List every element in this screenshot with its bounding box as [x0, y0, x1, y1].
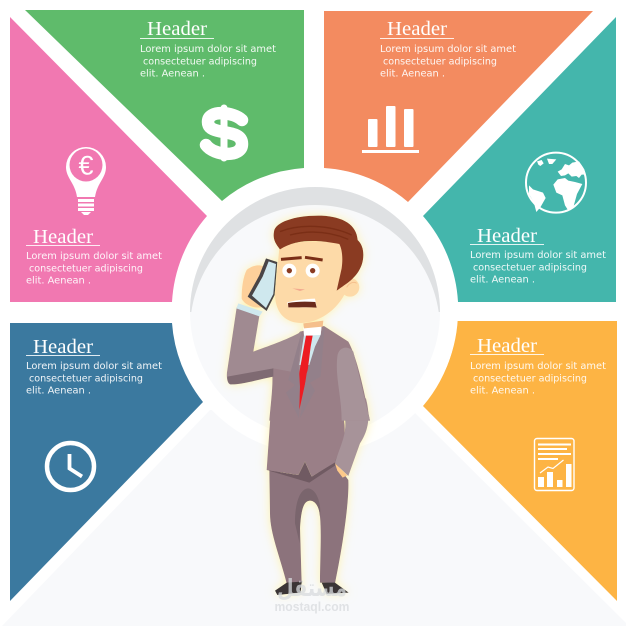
text: orange body: Lorem ipsum dolor sit amet [380, 44, 516, 55]
text: orange body [380, 44, 516, 80]
character nose [292, 288, 305, 291]
watermark: mostaql.com [274, 600, 350, 614]
panel: pink bulb [10, 17, 207, 302]
text: teal body [470, 250, 606, 286]
character hair [274, 216, 363, 291]
character phone [248, 258, 277, 311]
icon: bar chart [362, 106, 419, 153]
text: blue body: consectetuer adipiscing [29, 374, 143, 384]
icon: euro light bulb [66, 147, 106, 215]
center circle [172, 168, 458, 454]
character mouth [287, 299, 317, 308]
text: blue body: elit. Aenean . [26, 386, 91, 396]
panel: blue clock [10, 323, 203, 601]
icon: dollar sign [206, 108, 242, 158]
heading: blue header: Header [33, 336, 93, 358]
text: yellow body: consectetuer adipiscing [473, 374, 587, 384]
icon: euro light bulb: € [78, 150, 94, 180]
character: businessman on phone [227, 216, 370, 595]
text: yellow body: elit. Aenean . [470, 386, 535, 396]
character eyes [282, 264, 320, 278]
bottom light panel [2, 410, 626, 626]
heading: teal header: Header [477, 225, 537, 247]
heading: green header: Header [147, 18, 207, 40]
text: green body: elit. Aenean . [140, 68, 205, 80]
text: orange body: consectetuer adipiscing [383, 56, 497, 68]
text: blue body: Lorem ipsum dolor sit amet [26, 361, 162, 372]
character brows [281, 257, 323, 260]
panel: teal globe [423, 17, 616, 302]
character hand [242, 265, 267, 308]
text: blue body [26, 361, 162, 396]
icon: report document [534, 438, 574, 490]
character legs and lower jacket [267, 398, 368, 595]
text: green body: Lorem ipsum dolor sit amet [140, 44, 276, 55]
heading: pink header: Header [33, 226, 93, 248]
text: teal body: consectetuer adipiscing [473, 262, 587, 274]
panel: yellow report [423, 321, 617, 601]
text: green body [140, 44, 276, 80]
icon: globe [526, 153, 586, 213]
panel: green dollar [25, 10, 304, 201]
heading: orange header: Header [387, 18, 447, 40]
text: pink body: consectetuer adipiscing [29, 264, 143, 274]
panel: orange chart [324, 11, 593, 202]
character cuff [236, 303, 263, 316]
icon: clock [47, 443, 94, 490]
text: pink body: Lorem ipsum dolor sit amet [26, 251, 162, 262]
character upper body and head [227, 216, 370, 421]
text: pink body: elit. Aenean . [26, 276, 91, 286]
watermark: مستقل [277, 574, 347, 602]
text: yellow body: Lorem ipsum dolor sit amet [470, 361, 606, 372]
text: teal body: Lorem ipsum dolor sit amet [470, 250, 606, 261]
text: orange body: elit. Aenean . [380, 68, 445, 80]
text: pink body [26, 251, 162, 286]
heading: yellow header: Header [477, 335, 537, 357]
text: green body: consectetuer adipiscing [143, 56, 257, 68]
text: yellow body [470, 361, 606, 396]
character ear [341, 278, 359, 297]
character face [275, 241, 347, 323]
text: teal body: elit. Aenean . [470, 274, 535, 286]
watermark [274, 574, 350, 614]
